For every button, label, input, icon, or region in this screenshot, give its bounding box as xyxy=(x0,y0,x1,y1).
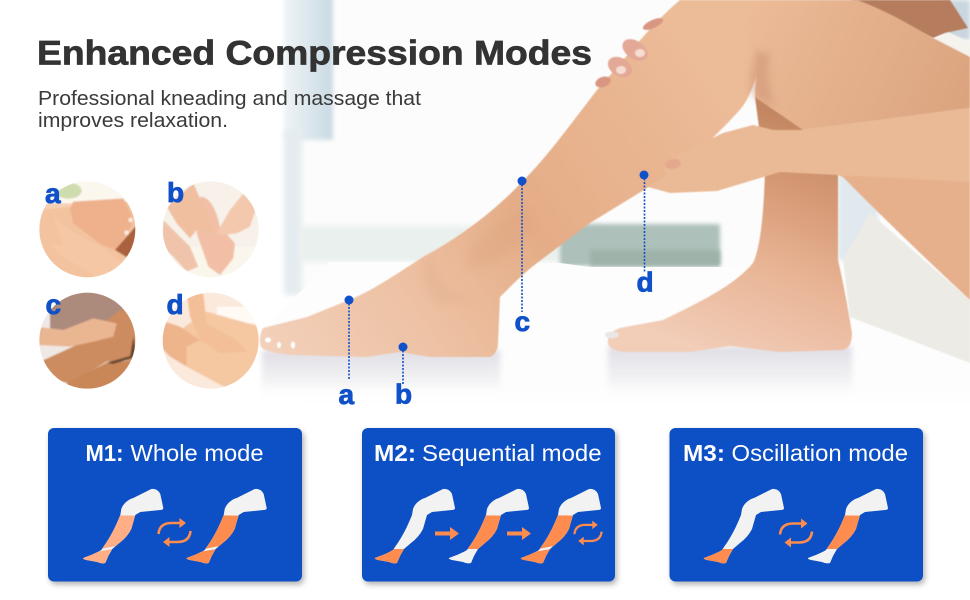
marker b xyxy=(395,342,412,410)
panel: M1 whole mode xyxy=(48,428,302,582)
icon: leg calf orange xyxy=(449,489,529,563)
upper thigh xyxy=(725,0,970,130)
M3 heading: M3: xyxy=(683,440,725,466)
circle letters: b xyxy=(167,177,184,208)
icon: leg full orange xyxy=(186,489,267,563)
forearm and hand xyxy=(648,108,970,193)
circle d: calf massage xyxy=(160,290,260,390)
marker d xyxy=(636,170,654,298)
subtitle: improves relaxation. xyxy=(38,109,228,132)
panel: M2 sequential mode xyxy=(362,428,615,582)
subtitle xyxy=(38,87,421,132)
marker d: d xyxy=(636,266,654,298)
fingers on knee xyxy=(594,16,665,89)
rear leg and foot xyxy=(608,97,852,352)
panel: M3 oscillation mode xyxy=(670,428,923,582)
M2 heading: Sequential mode xyxy=(422,440,602,466)
subtitle: Professional kneading and massage that xyxy=(38,87,421,110)
circle a: foot massage xyxy=(37,180,137,280)
icon: cycle arrows xyxy=(158,518,190,547)
M1 heading: Whole mode xyxy=(130,440,264,466)
marker c xyxy=(514,176,530,337)
circle c: leg massage xyxy=(37,290,137,393)
soft shading on legs xyxy=(423,50,775,305)
soft fade at bottom of photo xyxy=(240,380,970,410)
toenails xyxy=(265,332,619,348)
icon: cycle arrows xyxy=(574,521,602,545)
icon: arrow right second xyxy=(507,527,531,540)
marker a: a xyxy=(338,379,354,410)
marker a xyxy=(338,296,354,410)
circle letters: d xyxy=(166,289,184,320)
icon: leg full orange xyxy=(521,489,601,563)
icon: leg foot orange xyxy=(375,489,455,563)
M1 heading: M1: xyxy=(86,440,124,466)
massage photo circles xyxy=(37,180,260,393)
icon: leg foot orange xyxy=(704,489,784,563)
circle b: sole massage xyxy=(160,180,260,280)
circle letters: c xyxy=(46,289,61,320)
icon: arrow right xyxy=(435,527,459,540)
M3 heading: Oscillation mode xyxy=(732,440,908,466)
marker c: c xyxy=(514,306,530,337)
icon: leg calf orange xyxy=(808,489,888,563)
M2 heading: M2: xyxy=(374,440,416,466)
marker b: b xyxy=(395,378,412,410)
circle letters: a xyxy=(45,178,61,209)
photo: bare legs and hands xyxy=(260,0,970,357)
towel xyxy=(843,0,970,363)
thumb nail xyxy=(664,157,682,171)
circle letters xyxy=(45,177,184,320)
icon: leg light orange xyxy=(83,489,163,563)
title: Enhanced Compression Modes xyxy=(37,34,592,72)
icon: cycle arrows xyxy=(780,518,812,548)
lower thigh xyxy=(838,175,970,300)
front leg and foot xyxy=(260,0,770,357)
